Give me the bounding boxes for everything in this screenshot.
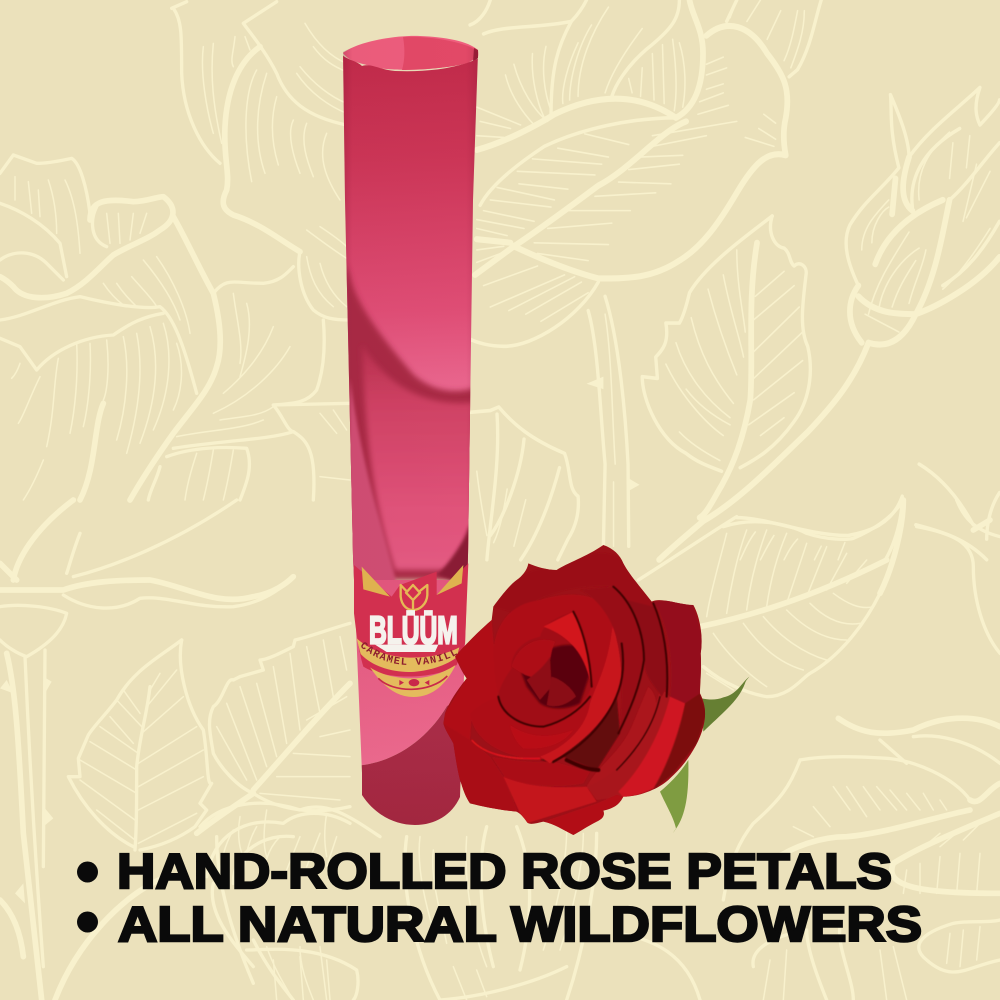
label bottom crest <box>370 665 456 697</box>
logo wordmark: BLŪŪM <box>369 609 458 653</box>
tube base shadow <box>362 705 460 825</box>
feature line 1: HAND-ROLLED ROSE PETALS <box>117 844 892 899</box>
bullet 2 <box>77 912 98 932</box>
lower petal <box>356 580 466 766</box>
rose bloom <box>440 540 713 840</box>
label band: CARAMEL VANILLA <box>361 642 457 665</box>
tube back rim <box>343 36 478 70</box>
background pattern: rose line art, upper left <box>0 2 350 500</box>
background pattern: roses and leaves, lower right <box>620 500 1000 1000</box>
rose leaf lower <box>660 760 688 833</box>
feature line 2: ALL NATURAL WILDFLOWERS <box>118 897 922 952</box>
background pattern: rose line art, upper right <box>470 0 1000 560</box>
illustration: red rose with leaves <box>440 540 749 840</box>
label band <box>354 564 468 697</box>
bullet list: product features <box>77 844 922 952</box>
bullet 1 <box>77 862 98 882</box>
icon: tulip <box>401 585 427 610</box>
product: rolled rose petal tube <box>343 36 478 825</box>
rose leaf upper <box>702 677 749 732</box>
background pattern: rose below product <box>200 803 597 1000</box>
background pattern: stem and leaves, lower left <box>0 500 350 1000</box>
first petal shadow and second petal <box>345 262 480 580</box>
tube body <box>340 30 480 830</box>
label corner triangles <box>362 565 463 597</box>
flavour ribbon <box>357 638 459 672</box>
rose petal creases <box>498 587 667 770</box>
